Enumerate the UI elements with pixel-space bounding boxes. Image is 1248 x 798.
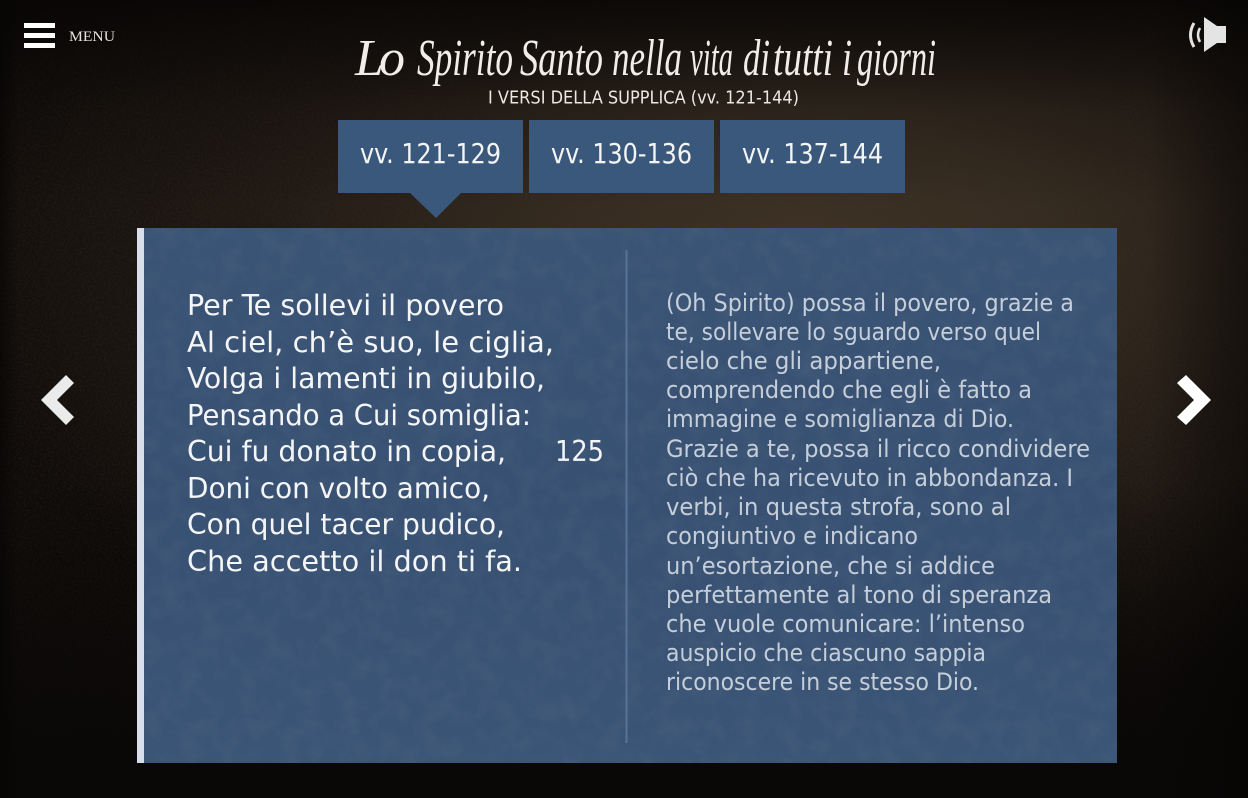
menu label: MENU bbox=[69, 29, 115, 45]
verse text: Al ciel, ch’è suo, le ciglia, bbox=[187, 326, 554, 359]
commentary text: verbi, in questa strofa, sono al bbox=[666, 493, 1011, 521]
title: nella bbox=[612, 30, 682, 87]
commentary text: ciò che ha ricevuto in abbondanza. I bbox=[666, 464, 1073, 492]
tab: vv. 121-129 (active, with pointer) bbox=[338, 120, 523, 218]
verse text: Doni con volto amico, bbox=[187, 472, 490, 505]
column divider bbox=[626, 250, 628, 743]
verse text: Cui fu donato in copia, bbox=[187, 435, 506, 468]
tab: vv. 130-136: vv. 130-136 bbox=[551, 137, 692, 170]
commentary text: (Oh Spirito) possa il povero, grazie a bbox=[666, 289, 1074, 317]
commentary text: comprendendo che egli è fatto a bbox=[666, 376, 1032, 404]
icon: next arrow bbox=[1177, 375, 1211, 425]
tab: vv. 121-129 (active, with pointer): vv. 121-129 bbox=[360, 137, 501, 170]
title: vita bbox=[690, 30, 733, 87]
subtitle: I VERSI DELLA SUPPLICA (vv. 121-144) bbox=[488, 88, 799, 108]
verse text: 125 bbox=[555, 435, 604, 468]
title: tutti bbox=[773, 30, 833, 87]
verse text: Volga i lamenti in giubilo, bbox=[187, 362, 545, 395]
icon: speaker bbox=[1190, 17, 1226, 52]
tab: vv. 137-144: vv. 137-144 bbox=[742, 137, 883, 170]
title: Spirito bbox=[417, 30, 513, 87]
tab: vv. 130-136 bbox=[529, 120, 714, 193]
panel left accent bar bbox=[137, 228, 144, 763]
icon: previous arrow bbox=[41, 375, 74, 425]
verse text bbox=[187, 289, 604, 578]
commentary text: Grazie a te, possa il ricco condividere bbox=[666, 435, 1090, 463]
verse text: Che accetto il don ti fa. bbox=[187, 545, 522, 578]
commentary text: che vuole comunicare: l’intenso bbox=[666, 610, 1025, 638]
commentary text: riconoscere in se stesso Dio. bbox=[666, 668, 979, 696]
tab: vv. 137-144 bbox=[720, 120, 905, 193]
commentary text bbox=[666, 289, 1090, 696]
title: giorni bbox=[857, 30, 936, 87]
commentary text: un’esortazione, che si addice bbox=[666, 552, 995, 580]
icon: hamburger menu bbox=[24, 23, 55, 48]
title: i bbox=[842, 30, 852, 87]
commentary text: congiuntivo e indicano bbox=[666, 522, 918, 550]
title: Santo bbox=[520, 30, 603, 87]
commentary text: auspicio che ciascuno sappia bbox=[666, 639, 986, 667]
panel: verse and commentary bbox=[137, 228, 1117, 763]
verse text: Con quel tacer pudico, bbox=[187, 508, 505, 541]
commentary text: immagine e somiglianza di Dio. bbox=[666, 405, 1014, 433]
title: Lo bbox=[354, 30, 405, 87]
commentary text: cielo che gli appartiene, bbox=[666, 347, 941, 375]
commentary text: te, sollevare lo sguardo verso quel bbox=[666, 318, 1041, 346]
panel background bbox=[137, 228, 1117, 763]
verse text: Per Te sollevi il povero bbox=[187, 289, 504, 322]
panel texture bbox=[144, 228, 1117, 763]
verse text: Pensando a Cui somiglia: bbox=[187, 399, 531, 432]
title bbox=[354, 30, 936, 87]
commentary text: perfettamente al tono di speranza bbox=[666, 581, 1052, 609]
title: di bbox=[743, 30, 770, 87]
